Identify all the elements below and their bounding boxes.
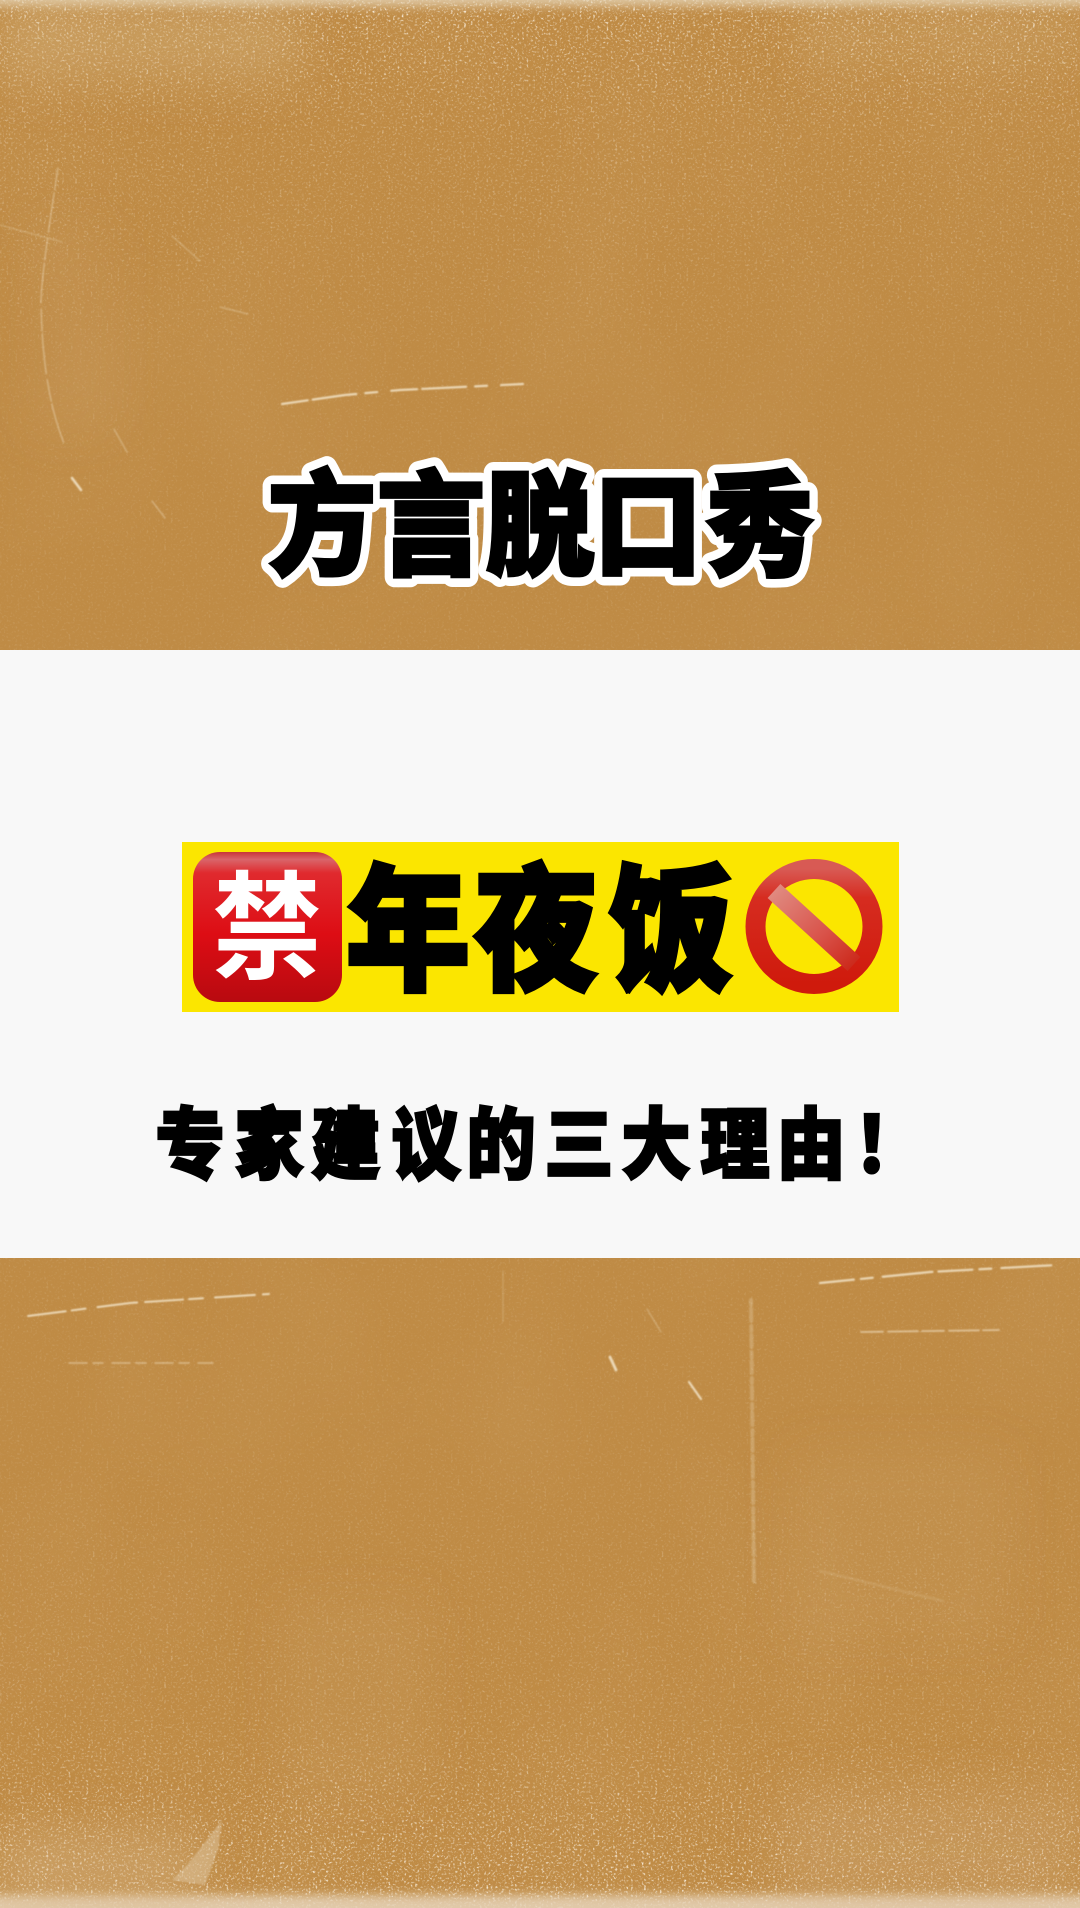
title: 方言脱口秀: 方言脱口秀 <box>268 465 814 591</box>
subtitle: 专家建议的三大理由！: 专家建议的三大理由！ <box>155 1102 924 1189</box>
banner: yellow highlight bar <box>182 842 899 1012</box>
panel: white centre band <box>0 650 1080 1258</box>
banner text: 年夜饭: 年夜饭 <box>346 856 733 1008</box>
icon: red 禁 button <box>193 852 342 1002</box>
title: 方言脱口秀: 方言脱口秀 <box>268 465 814 591</box>
icon: prohibited sign <box>756 869 872 984</box>
icon: red 禁 button: 禁 <box>212 864 322 995</box>
